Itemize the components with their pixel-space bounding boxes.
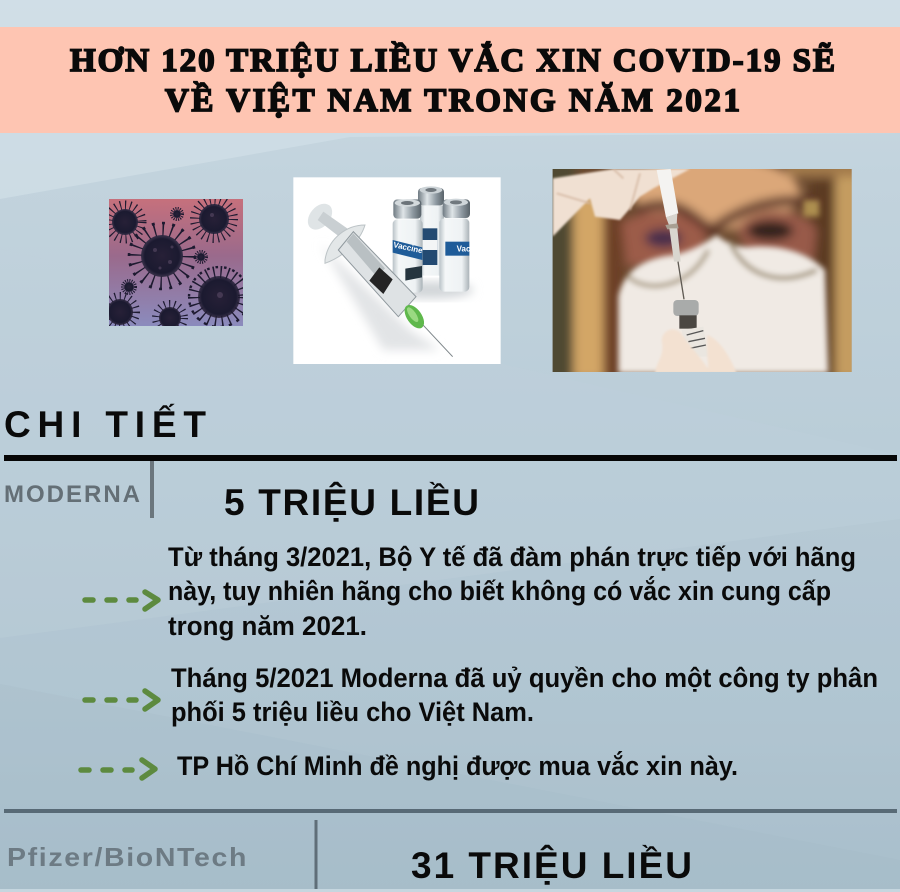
- vial right: [439, 199, 475, 292]
- paragraph 1: [168, 542, 856, 641]
- paragraph 1: Từ tháng 3/2021, Bộ Y tế đã đàm phán trực tiếp với hãng: [168, 542, 856, 572]
- vial: [673, 300, 706, 349]
- syringe: [303, 199, 453, 357]
- Pfizer label: Pfizer/BioNTech: [7, 842, 248, 872]
- heading rule: [4, 455, 897, 461]
- paragraph 2: Tháng 5/2021 Moderna đã uỷ quyền cho một công ty phân: [171, 663, 878, 693]
- Moderna label: MODERNA: [4, 481, 140, 508]
- arrow 3: [81, 760, 155, 778]
- title banner: [0, 27, 900, 133]
- section divider: [4, 809, 897, 813]
- image: health worker in mask with syringe and vial: [552, 169, 852, 372]
- image: syringe and vaccine vials: [293, 177, 501, 364]
- vial left: Vaccine: [393, 240, 424, 255]
- vial left: [393, 199, 424, 293]
- title line 1: HƠN 120 TRIỆU LIỀU VẮC XIN COVID-19 SẼ: [70, 40, 835, 79]
- paragraph 2: phối 5 triệu liều cho Việt Nam.: [171, 697, 534, 727]
- Pfizer dose count: 31 TRIỆU LIỀU: [411, 844, 692, 886]
- paragraph 2: [171, 663, 878, 727]
- glove bottom: [655, 329, 737, 373]
- Moderna vertical divider: [150, 461, 154, 518]
- section heading: CHI TIẾT: [4, 404, 206, 445]
- paragraph 1: này, tuy nhiên hãng cho biết không có vắc xin cung cấp: [168, 576, 831, 606]
- title line 2: VỀ VIỆT NAM TRONG NĂM 2021: [165, 80, 740, 119]
- soft shadows: [387, 281, 473, 299]
- glove top left: [553, 169, 690, 237]
- paragraph 1: trong năm 2021.: [168, 611, 367, 641]
- vial back: [418, 186, 444, 276]
- image: coronavirus particles: [109, 199, 243, 326]
- syringe barrel: [657, 169, 684, 299]
- arrow 2: [85, 691, 158, 709]
- Pfizer vertical divider: [314, 820, 318, 889]
- vial right: Vacc: [457, 244, 475, 253]
- Moderna dose count: 5 TRIỆU LIỀU: [224, 481, 479, 523]
- arrow 1: [85, 592, 158, 609]
- paragraph 3: TP Hồ Chí Minh đề nghị được mua vắc xin này.: [177, 751, 738, 781]
